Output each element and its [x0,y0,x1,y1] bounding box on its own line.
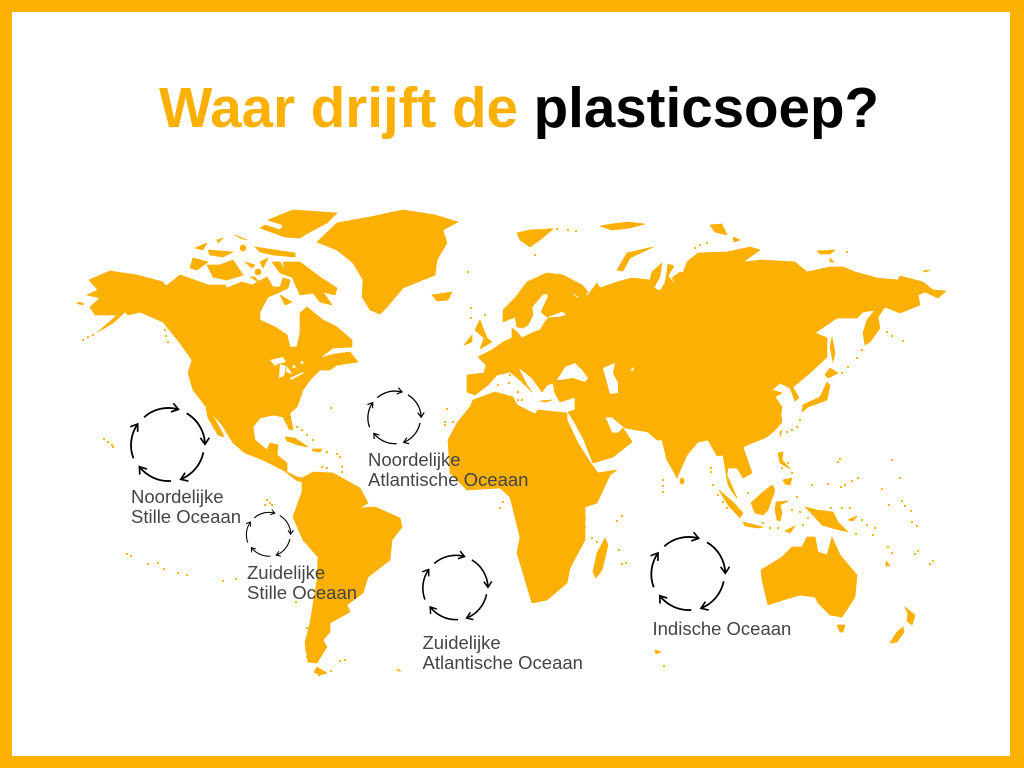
Arctic islands [190,210,452,305]
label: Noordelijke Atlantische Oceaan: Noordelijke [368,449,461,470]
New Zealand [890,607,915,643]
label: Indische Oceaan: Indische Oceaan [652,618,791,639]
Europe islands [397,222,930,671]
Cuba and Hispaniola [285,437,322,452]
gyre: Noordelijke Stille Oceaan [131,408,205,481]
label: Noordelijke Atlantische Oceaan: Atlantische Oceaan [368,469,528,490]
Africa [448,392,617,603]
label: Zuidelijke Atlantische Oceaan: Zuidelijke [422,632,501,653]
title: Waar drijft de plasticsoep? [159,76,879,139]
Australia [761,537,857,632]
label: Noordelijke Stille Oceaan: Noordelijke [131,486,224,507]
gyre: Noordelijke Atlantische Oceaan [368,391,421,444]
gyre: Zuidelijke Stille Oceaan [246,512,291,556]
North and Central America [87,271,358,482]
gyre: Indische Oceaan [651,537,725,610]
Great Lakes [270,357,304,380]
Japan and Sakhalin [780,337,838,437]
Baja California [206,408,224,437]
gyre: Zuidelijke Atlantische Oceaan [423,555,488,620]
small islands [78,229,933,675]
label: Noordelijke Stille Oceaan: Stille Oceaan [131,506,241,527]
Madagascar [593,538,608,578]
label: Zuidelijke Stille Oceaan: Stille Oceaan [247,582,357,603]
world map [78,210,946,675]
Greenland [317,210,458,314]
label: Zuidelijke Atlantische Oceaan: Atlantische Oceaan [422,652,583,673]
label: Zuidelijke Stille Oceaan: Zuidelijke [247,562,325,583]
Indonesia and New Guinea [719,452,857,533]
South America [293,472,402,675]
Eurasia [467,247,946,498]
inland seas [557,363,634,394]
